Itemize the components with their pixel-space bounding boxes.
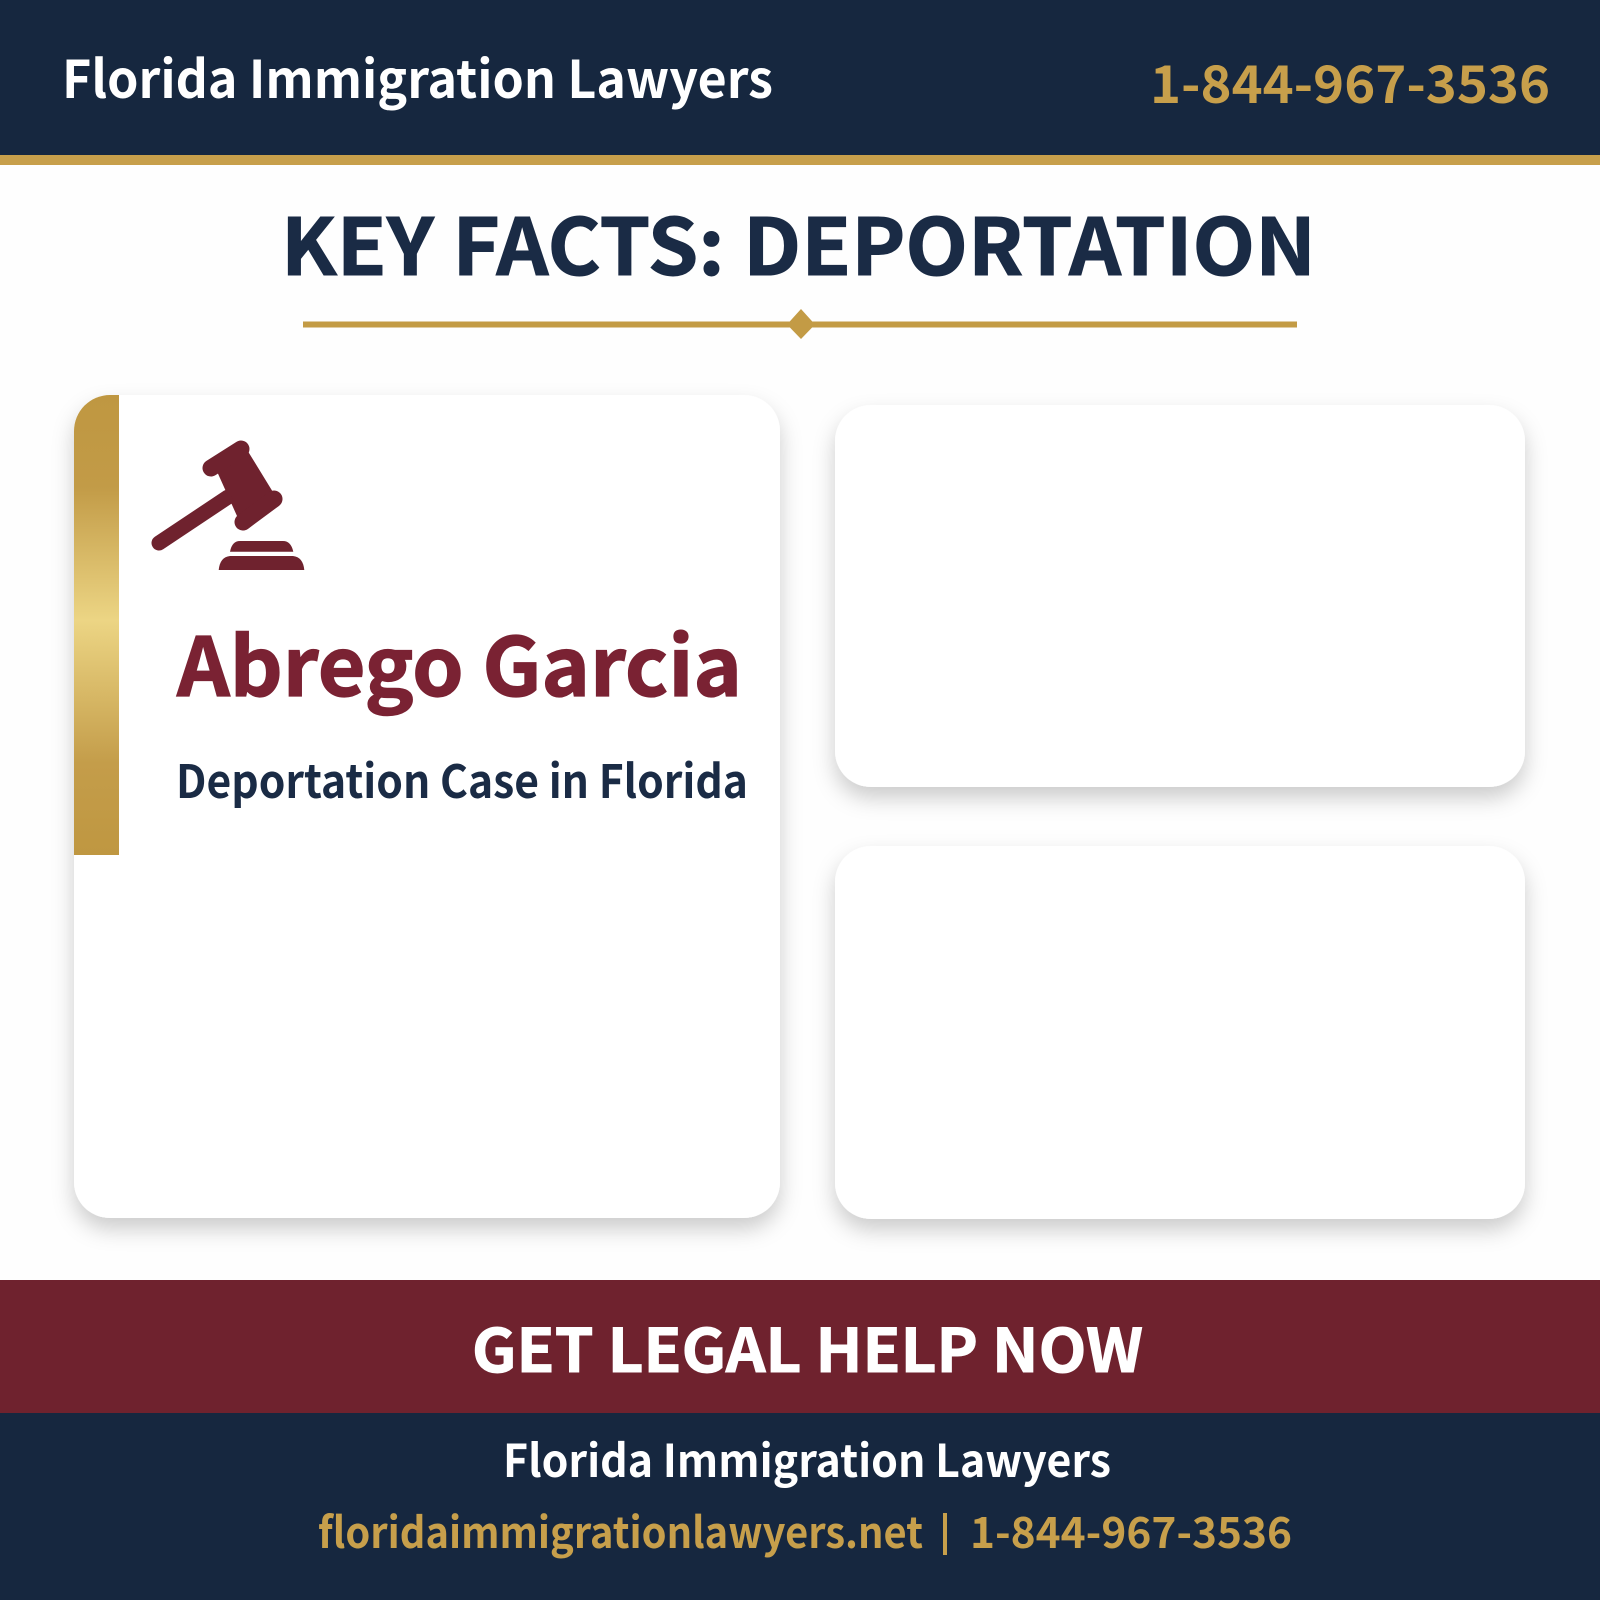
case subtitle: Deportation Case in Florida (176, 746, 748, 812)
panel: bottom right card (835, 846, 1525, 1219)
call to action band (0, 1280, 1600, 1413)
panel: top right card (835, 405, 1525, 787)
call to action text: GET LEGAL HELP NOW (472, 1303, 1143, 1390)
icon: gavel (159, 449, 304, 570)
footer website and phone: 1-844-967-3536 (970, 1499, 1292, 1561)
header phone number: 1-844-967-3536 (1150, 43, 1550, 118)
footer firm name: Florida Immigration Lawyers (503, 1425, 1111, 1490)
header firm name: Florida Immigration Lawyers (62, 38, 773, 113)
footer website and phone (318, 1499, 1292, 1561)
case name: Abrego Garcia (176, 603, 742, 720)
footer band (0, 1413, 1600, 1600)
title divider with diamond (303, 309, 1297, 339)
panel: Abrego Garcia case (74, 395, 780, 1218)
footer website and phone: floridaimmigrationlawyers.net (318, 1499, 923, 1561)
header band (0, 0, 1600, 165)
gold accent bar (74, 395, 119, 855)
title: KEY FACTS: DEPORTATION (281, 186, 1316, 298)
